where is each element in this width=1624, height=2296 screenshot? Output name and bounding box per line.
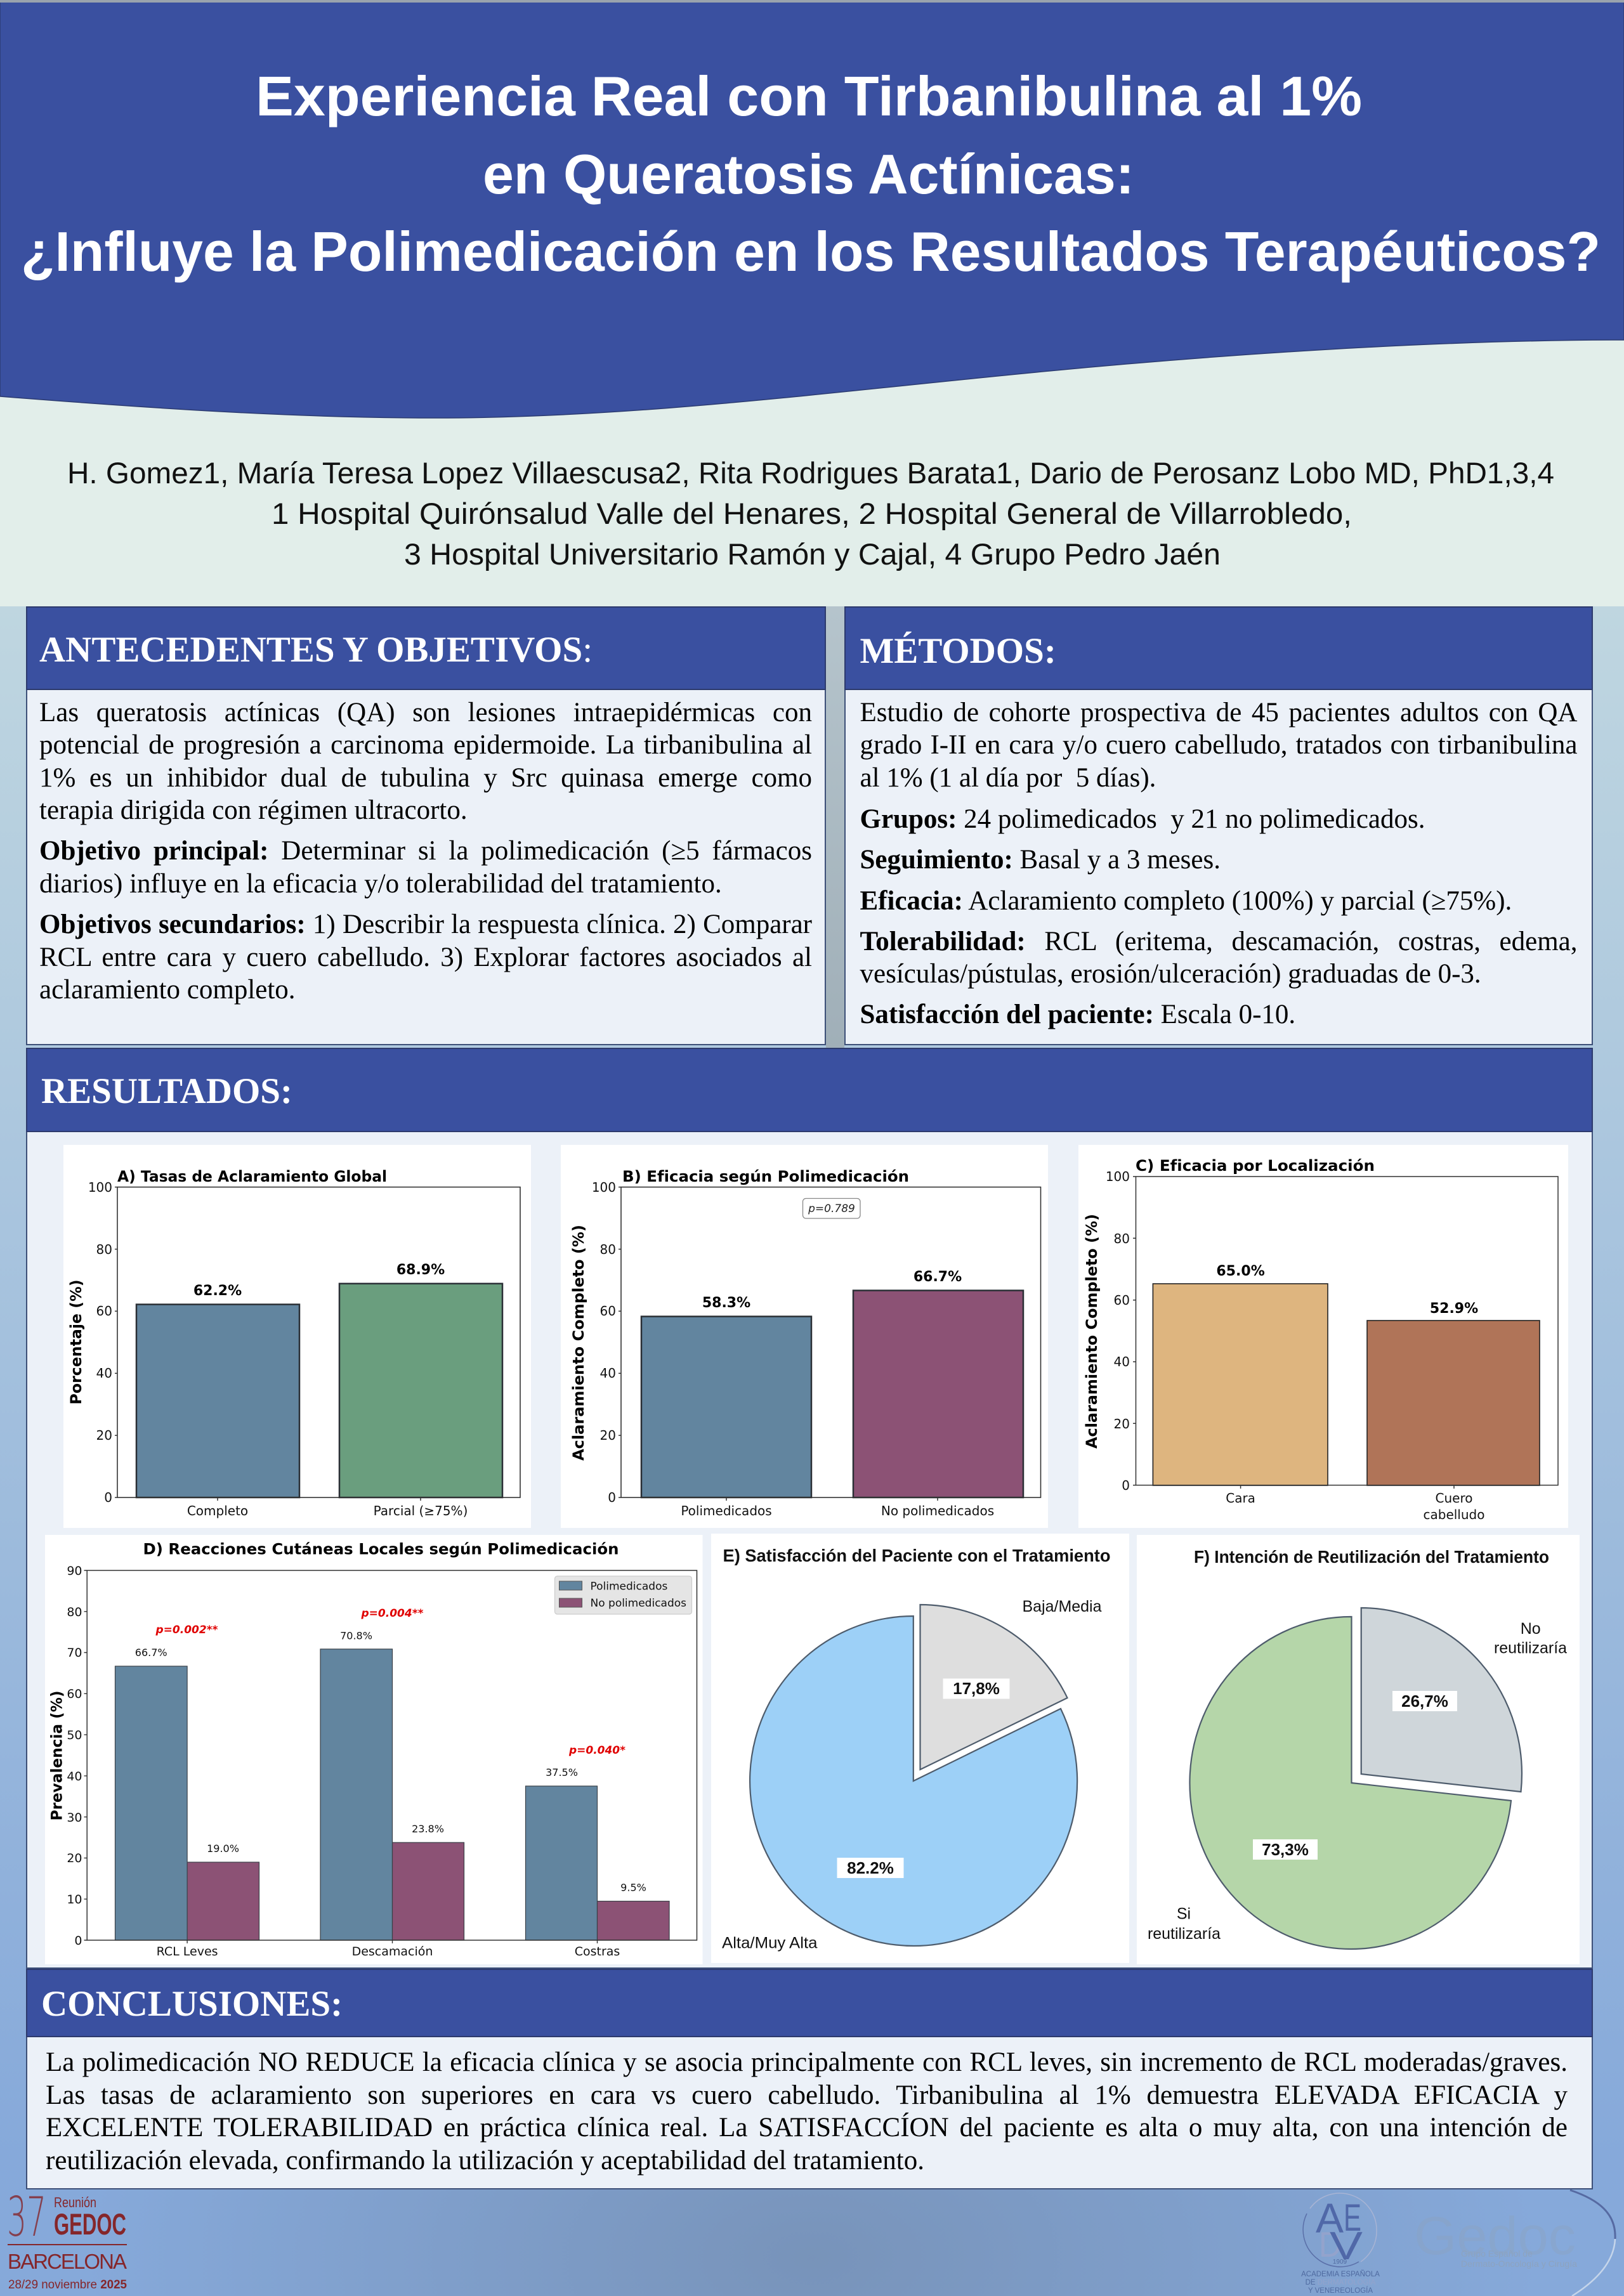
text: metodos (860, 696, 1577, 1033)
chart C: eficacia por localizacion: C) Eficacia por Localización (1136, 1157, 1375, 1175)
text: conclusiones: reutilización elevada, confirmando la utilización y aceptabilidad del tratamiento. (46, 2146, 924, 2175)
logo: AEDV (1300, 2191, 1383, 2296)
chart D: reacciones cutaneas locales: 66.7% (134, 1647, 167, 1659)
chart F: intencion de reutilizacion: 26,7% (1401, 1692, 1448, 1711)
chart D: reacciones cutaneas locales: 20 (67, 1851, 82, 1865)
chart F: intencion de reutilizacion: No (1521, 1620, 1541, 1638)
chart A: tasas de aclaramiento global: 62.2% (193, 1283, 242, 1299)
logo: AEDV: Y VENEREOLOGÍA (1308, 2286, 1373, 2295)
chart B: eficacia segun polimedicacion: 40 (600, 1366, 616, 1381)
chart A: tasas de aclaramiento global: 60 (96, 1303, 112, 1319)
chart B: eficacia segun polimedicacion: Polimedicados (681, 1503, 772, 1518)
chart D: reacciones cutaneas locales: 90 (67, 1564, 82, 1578)
text: conclusiones: La polimedicación NO REDUCE la eficacia clínica y se asocia principalmente con RCL leves, sin incremento de RCL moderadas/graves. (46, 2047, 1568, 2077)
chart B: eficacia segun polimedicacion: Aclaramiento Completo (%) (570, 1225, 587, 1461)
text: metodos: Grupos: 24 polimedicados y 21 no polimedicados. (860, 804, 1425, 833)
panel: metodos (844, 606, 1593, 1045)
text: antecedentes (39, 696, 812, 1007)
chart C: eficacia por localizacion (1078, 1145, 1568, 1528)
panel header: metodos (844, 606, 1593, 690)
heading: resultados: RESULTADOS: (41, 1071, 292, 1111)
chart D: reacciones cutaneas locales: 19.0% (207, 1843, 239, 1855)
text: antecedentes: terapia dirigida con régimen ultracorto. (39, 795, 468, 825)
text: metodos: Estudio de cohorte prospectiva de 45 pacientes adultos con QA (860, 698, 1577, 727)
chart E: satisfaccion del paciente: E) Satisfacción del Paciente con el Tratamiento (723, 1546, 1110, 1565)
logo: 37 reunion GEDOC Barcelona: 28/29 noviembre 2025 (8, 2278, 127, 2292)
text: metodos: Seguimiento: Basal y a 3 meses. (860, 845, 1221, 874)
chart F: intencion de reutilizacion: F) Intención de Reutilización del Tratamiento (1194, 1547, 1549, 1567)
chart C: eficacia por localizacion: cabelludo (1424, 1507, 1484, 1522)
authors and affiliations (67, 456, 1554, 571)
title: ¿Influye la Polimedicación en los Resultados Terapéuticos? (21, 220, 1601, 283)
text: antecedentes: 1% es un inhibidor dual de tubulina y Src quinasa emerge como (39, 762, 812, 793)
text: antecedentes: Objetivo principal: Determinar si la polimedicación (≥5 fármacos (39, 836, 812, 865)
chart E: satisfaccion del paciente: Baja/Media (1022, 1598, 1101, 1615)
chart D: reacciones cutaneas locales: 0 (74, 1934, 82, 1948)
panel header: resultados (26, 1048, 1593, 1132)
chart B: eficacia segun polimedicacion: 0 (608, 1490, 616, 1505)
chart D: reacciones cutaneas locales: D) Reacciones Cutáneas Locales según Polimedicación (143, 1540, 619, 1558)
chart A: tasas de aclaramiento global: Parcial (≥75%) (374, 1503, 468, 1518)
text: metodos: al 1% (1 al día por 5 días). (860, 762, 1156, 793)
chart C: eficacia por localizacion: 0 (1122, 1478, 1130, 1493)
logo: 37 reunion GEDOC Barcelona: GEDOC (54, 2207, 126, 2241)
text: antecedentes: diarios) influye en la eficacia y/o tolerabilidad del tratamiento. (39, 869, 722, 898)
text: antecedentes: potencial de progresión a carcinoma epidermoide. La tirbanibulina al (39, 729, 812, 760)
chart A: tasas de aclaramiento global: A) Tasas de Aclaramiento Global (117, 1168, 387, 1185)
chart E: satisfaccion del paciente (710, 1534, 1129, 1963)
chart B: eficacia segun polimedicacion: 20 (600, 1428, 616, 1443)
logo: AEDV: V (1330, 2224, 1363, 2268)
chart D: reacciones cutaneas locales: 23.8% (412, 1823, 443, 1835)
chart A: tasas de aclaramiento global: Porcentaje (%) (67, 1280, 85, 1404)
text: conclusiones: Las tasas de aclaramiento son superiores en cara vs cuero cabelludo. Tirbanibulina al 1% demuestra ELEVADA EFICACIA y (46, 2080, 1568, 2110)
chart C: eficacia por localizacion: Aclaramiento Completo (%) (1083, 1214, 1101, 1449)
text: antecedentes: RCL entre cara y cuero cabelludo. 3) Explorar factores asociados al (39, 943, 812, 972)
chart C: eficacia por localizacion: 20 (1114, 1416, 1130, 1432)
authors and affiliations: H. Gomez1, María Teresa Lopez Villaescusa2, Rita Rodrigues Barata1, Dario de Perosanz Lobo MD, PhD1,3,4 (67, 456, 1554, 490)
chart B: eficacia segun polimedicacion: p=0.789 (808, 1203, 855, 1215)
text: metodos: vesículas/pústulas, erosión/ulceración) graduadas de 0-3. (860, 959, 1481, 988)
logo: AEDV: A (1316, 2195, 1344, 2241)
chart F: intencion de reutilizacion: 73,3% (1262, 1840, 1309, 1859)
chart A: tasas de aclaramiento global: 68.9% (396, 1262, 445, 1278)
chart D: reacciones cutaneas locales: 10 (67, 1893, 82, 1907)
chart C: eficacia por localizacion: 80 (1114, 1231, 1130, 1246)
text: antecedentes: aclaramiento completo. (39, 974, 296, 1005)
chart D: reacciones cutaneas locales: p=0.040* (568, 1744, 625, 1757)
chart A: tasas de aclaramiento global: 40 (96, 1366, 112, 1381)
chart D: reacciones cutaneas locales: p=0.002** (155, 1624, 218, 1636)
text: antecedentes: Objetivos secundarios: 1) Describir la respuesta clínica. 2) Comparar (39, 910, 812, 939)
text: conclusiones (46, 2046, 1568, 2179)
chart B: eficacia segun polimedicacion: B) Eficacia según Polimedicación (622, 1168, 909, 1185)
authors and affiliations: 3 Hospital Universitario Ramón y Cajal, 4 Grupo Pedro Jaén (404, 537, 1221, 571)
text: conclusiones: EXCELENTE TOLERABILIDAD en práctica clínica real. La SATISFACCÍON del paciente es alta o muy alta, con una intención de (46, 2113, 1568, 2143)
text: antecedentes: Las queratosis actínicas (QA) son lesiones intraepidérmicas con (39, 698, 812, 727)
panel header: conclusiones (26, 1969, 1593, 2037)
chart C: eficacia por localizacion: 65.0% (1216, 1263, 1265, 1279)
chart C: eficacia por localizacion: 100 (1106, 1169, 1130, 1184)
text: metodos: Satisfacción del paciente: Escala 0-10. (860, 1000, 1295, 1029)
chart C: eficacia por localizacion: 60 (1114, 1293, 1130, 1308)
chart C: eficacia por localizacion: Cuero (1436, 1490, 1472, 1506)
chart B: eficacia segun polimedicacion: No polimedicados (881, 1503, 994, 1518)
chart F: intencion de reutilizacion: reutilizaría (1148, 1925, 1221, 1943)
chart A: tasas de aclaramiento global: 0 (104, 1490, 112, 1505)
heading: antecedentes: ANTECEDENTES Y OBJETIVOS: (39, 630, 593, 670)
chart B: eficacia segun polimedicacion: 80 (600, 1242, 616, 1257)
chart F: intencion de reutilizacion: Si (1177, 1905, 1191, 1923)
logo: 37 reunion GEDOC Barcelona: Reunión (54, 2195, 96, 2210)
chart D: reacciones cutaneas locales: 80 (67, 1605, 82, 1619)
chart C: eficacia por localizacion: Cara (1226, 1490, 1255, 1506)
chart A: tasas de aclaramiento global: 100 (88, 1180, 112, 1195)
logo: 37 reunion GEDOC Barcelona: BARCELONA (8, 2250, 127, 2273)
chart B: eficacia segun polimedicacion: 60 (600, 1303, 616, 1319)
chart F: intencion de reutilizacion: reutilizaría (1494, 1639, 1567, 1657)
logo: 37 reunion GEDOC Barcelona: 37 (7, 2186, 46, 2249)
logo: Gedoc: Dermato-Oncología y Cirugía (1461, 2259, 1577, 2269)
chart D: reacciones cutaneas locales (44, 1535, 702, 1964)
chart D: reacciones cutaneas locales: 60 (67, 1687, 82, 1701)
logo: AEDV: DE DERMATOLOGÍA (1306, 2278, 1376, 2286)
authors and affiliations: 1 Hospital Quirónsalud Valle del Henares, 2 Hospital General de Villarrobledo, (272, 497, 1352, 530)
chart A: tasas de aclaramiento global: 20 (96, 1428, 112, 1443)
chart A: tasas de aclaramiento global: Completo (187, 1503, 248, 1518)
chart E: satisfaccion del paciente: 17,8% (953, 1679, 999, 1698)
panel: resultados (26, 1048, 1593, 1969)
chart B: eficacia segun polimedicacion: 58.3% (702, 1295, 750, 1311)
heading: metodos: MÉTODOS: (860, 631, 1056, 671)
logo: Gedoc: Grupo Español de (1461, 2248, 1533, 2259)
gap strip between top panels (826, 606, 844, 1050)
chart D: reacciones cutaneas locales: RCL Leves (156, 1945, 218, 1959)
logo: 37 reunion GEDOC Barcelona (0, 2191, 140, 2296)
heading: conclusiones: CONCLUSIONES: (41, 1984, 343, 2024)
chart D: reacciones cutaneas locales: p=0.004** (360, 1607, 423, 1620)
header banner (0, 0, 1624, 606)
chart D: reacciones cutaneas locales: 70 (67, 1646, 82, 1660)
chart D: reacciones cutaneas locales: Descamación (351, 1945, 433, 1959)
legend: No polimedicados (590, 1597, 686, 1610)
text: metodos: grado I-II en cara y/o cuero cabelludo, tratados con tirbanibulina (860, 729, 1577, 760)
chart D: reacciones cutaneas locales: 37.5% (546, 1766, 577, 1778)
logo: AEDV: ACADEMIA ESPAÑOLA (1301, 2270, 1380, 2278)
chart C: eficacia por localizacion: 52.9% (1430, 1301, 1478, 1317)
chart E: satisfaccion del paciente: Alta/Muy Alta (722, 1934, 817, 1952)
chart A: tasas de aclaramiento global: 80 (96, 1242, 112, 1257)
chart D: reacciones cutaneas locales: 9.5% (620, 1881, 646, 1894)
logo: Gedoc: Gedoc (1414, 2206, 1576, 2266)
legend: Polimedicados (590, 1581, 667, 1593)
chart D: reacciones cutaneas locales: Prevalencia (%) (48, 1691, 65, 1820)
panel: conclusiones (26, 1969, 1593, 2189)
title: en Queratosis Actínicas: (483, 143, 1134, 205)
text: metodos: Eficacia: Aclaramiento completo (100%) y parcial (≥75%). (860, 885, 1512, 916)
chart D: reacciones cutaneas locales: 70.8% (340, 1630, 372, 1641)
chart C: eficacia por localizacion: 40 (1114, 1354, 1130, 1369)
chart D: reacciones cutaneas locales: Costras (574, 1945, 620, 1959)
text: metodos: Tolerabilidad: RCL (eritema, descamación, costras, edema, (860, 926, 1577, 956)
chart D: reacciones cutaneas locales: 40 (67, 1770, 82, 1784)
legend (554, 1576, 691, 1614)
chart B: eficacia segun polimedicacion: 66.7% (914, 1269, 962, 1285)
panel: antecedentes y objetivos (26, 606, 826, 1045)
chart D: reacciones cutaneas locales: 50 (67, 1728, 82, 1742)
decorative curve (1561, 2188, 1624, 2296)
logo: AEDV: 1909 (1333, 2259, 1347, 2266)
panel header: antecedentes (26, 606, 826, 690)
chart B: eficacia segun polimedicacion (561, 1145, 1048, 1528)
chart F: intencion de reutilizacion (1137, 1535, 1580, 1964)
chart A: tasas de aclaramiento global (63, 1145, 531, 1528)
chart E: satisfaccion del paciente: 82.2% (847, 1858, 893, 1877)
chart B: eficacia segun polimedicacion: 100 (592, 1180, 616, 1195)
title (21, 65, 1601, 283)
chart D: reacciones cutaneas locales: 30 (67, 1811, 82, 1825)
logo: AEDV: E (1344, 2196, 1361, 2239)
title: Experiencia Real con Tirbanibulina al 1% (256, 65, 1362, 127)
logo: AEDV: D (1319, 2224, 1342, 2264)
